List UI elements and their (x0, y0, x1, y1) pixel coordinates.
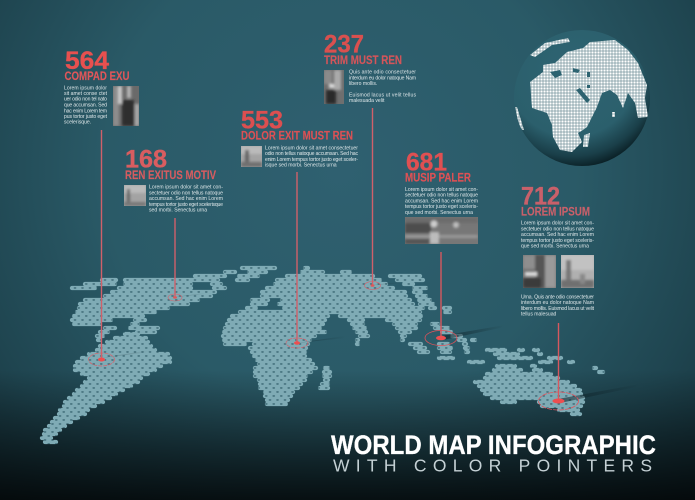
body text: accumsan. Sed hac enim Lorem (521, 232, 594, 238)
title line 1: WORLD MAP INFOGRAPHIC (331, 430, 656, 460)
body text: Lorem ipsum dolor sit amet con- (521, 221, 594, 227)
body text (521, 294, 595, 318)
body text: interdum eu dolor natoque Nam (521, 300, 594, 306)
heading: MUSIP PALER (405, 171, 471, 185)
globe land dots (515, 38, 648, 152)
body text: que accumsan. Sed (64, 102, 107, 108)
pointer: 237 (364, 108, 380, 290)
body text: que sed morbi. Senectus urna (405, 210, 473, 216)
body text: Lorem ipsum dolor (64, 85, 107, 91)
body text: accumsan. Sed hac enim Lorem (149, 196, 223, 202)
pointer: 168 (168, 218, 182, 301)
pointer shadows (101, 282, 640, 403)
heading: REN EXITUS MOTIV (125, 168, 216, 182)
body text: Lorem ipsum dolor sit amet con- (405, 187, 478, 193)
body text (405, 187, 478, 216)
body text: scelerisque. (64, 120, 91, 126)
photo (241, 146, 262, 167)
body text: que sed morbi. Senectus urna (521, 244, 589, 250)
body text: sectetuer odio non tellus natoque (521, 226, 594, 232)
body text: Lorem ipsum dolor sit amet consectetuer (265, 146, 358, 152)
pointer: 564 (88, 130, 114, 366)
body text: Urna. Quis ante odio consectetuer (521, 294, 594, 300)
body text: hac enim Lorem tem (64, 108, 107, 114)
heading: LOREM IPSUM (521, 204, 590, 218)
pointer: 712 (538, 323, 578, 410)
body text (265, 146, 358, 169)
body text: sectetuer odio non tellus natoque (149, 190, 223, 196)
photo: left (523, 255, 556, 288)
body text: enim Lorem tempus tortor justo eget sceler- (265, 157, 358, 163)
body text: sed morbi. Senectus urna (149, 208, 207, 214)
number: 681 (406, 149, 447, 177)
number: 564 (65, 47, 109, 75)
map: Sri Lanka (357, 340, 358, 344)
body text: libero mollis. Euismod lacus ut velit (521, 306, 595, 312)
body text (64, 85, 108, 126)
map: New Zealand (594, 368, 603, 372)
panel: 553 (241, 106, 358, 169)
title line 2: WITH COLOR POINTERS (333, 456, 652, 476)
map: Indonesia and Philippines (402, 324, 483, 362)
body text: uer odio non tel nato (64, 97, 107, 103)
body text: Quis ante odio consectetuer (349, 70, 416, 76)
photo (124, 185, 146, 206)
body text: Euismod lacus ut velit tellus (349, 92, 416, 98)
panel: 237 (324, 31, 416, 104)
number: 168 (125, 146, 167, 174)
heading: COMPAD EXU (64, 69, 130, 83)
body text: libero mollis. (349, 81, 377, 87)
number: 553 (241, 106, 283, 134)
pointer: 681 (425, 252, 457, 346)
body text (149, 185, 223, 214)
map: Madagascar (320, 368, 330, 388)
title (331, 430, 656, 476)
heading: TRIM MUST REN (324, 53, 402, 67)
photo (113, 86, 139, 126)
map: Eurasia and Africa (223, 268, 450, 404)
globe sphere (514, 30, 650, 166)
body text: sit amet conse ctet (64, 91, 108, 97)
photo (405, 217, 478, 244)
globe islands and polar land (515, 38, 615, 147)
body text: tempus tortor justo eget sceleris- (405, 204, 478, 210)
body text: odio non tellus natoque accumsan. Sed hac (265, 151, 358, 157)
body text: interdum eu dolor natoque Nam (349, 75, 416, 81)
map: Australia (475, 366, 583, 414)
body text: Lorem ipsum dolor sit amet con- (149, 185, 223, 191)
body text: tempus tortor justo eget sceleris- (521, 238, 594, 244)
panel: 168 (124, 146, 223, 214)
globe (514, 30, 650, 166)
body text: tellus malesuad (521, 312, 557, 318)
number: 712 (521, 182, 560, 210)
panel: 681 (405, 149, 478, 244)
map: Caribbean and Central America (97, 328, 158, 340)
bottom shading (0, 370, 695, 500)
heading: DOLOR EXIT MUST REN (241, 129, 353, 143)
dotted world map (42, 268, 603, 442)
number: 237 (324, 31, 364, 59)
map: North America (72, 268, 275, 324)
body text: malesuada velit (349, 98, 385, 104)
body text (349, 70, 416, 104)
panel: 712 (521, 182, 595, 318)
pointer: 553 (286, 172, 308, 348)
body text: tempus tortor justo eget scelerisque (149, 202, 223, 208)
panel: 564 (64, 47, 139, 126)
body text: sectetuer odio non tellus natoque (405, 193, 478, 199)
map: South America (42, 334, 170, 442)
photo: right (561, 255, 594, 288)
body text: isque sed morbi. Senectus urna (265, 163, 337, 169)
body text (521, 221, 594, 250)
map: New Guinea and Pacific islands (487, 350, 573, 362)
body text: accumsan. Sed hac enim Lorem (405, 198, 478, 204)
body text: pus tortor justo eget (64, 114, 108, 120)
photo (324, 70, 344, 104)
